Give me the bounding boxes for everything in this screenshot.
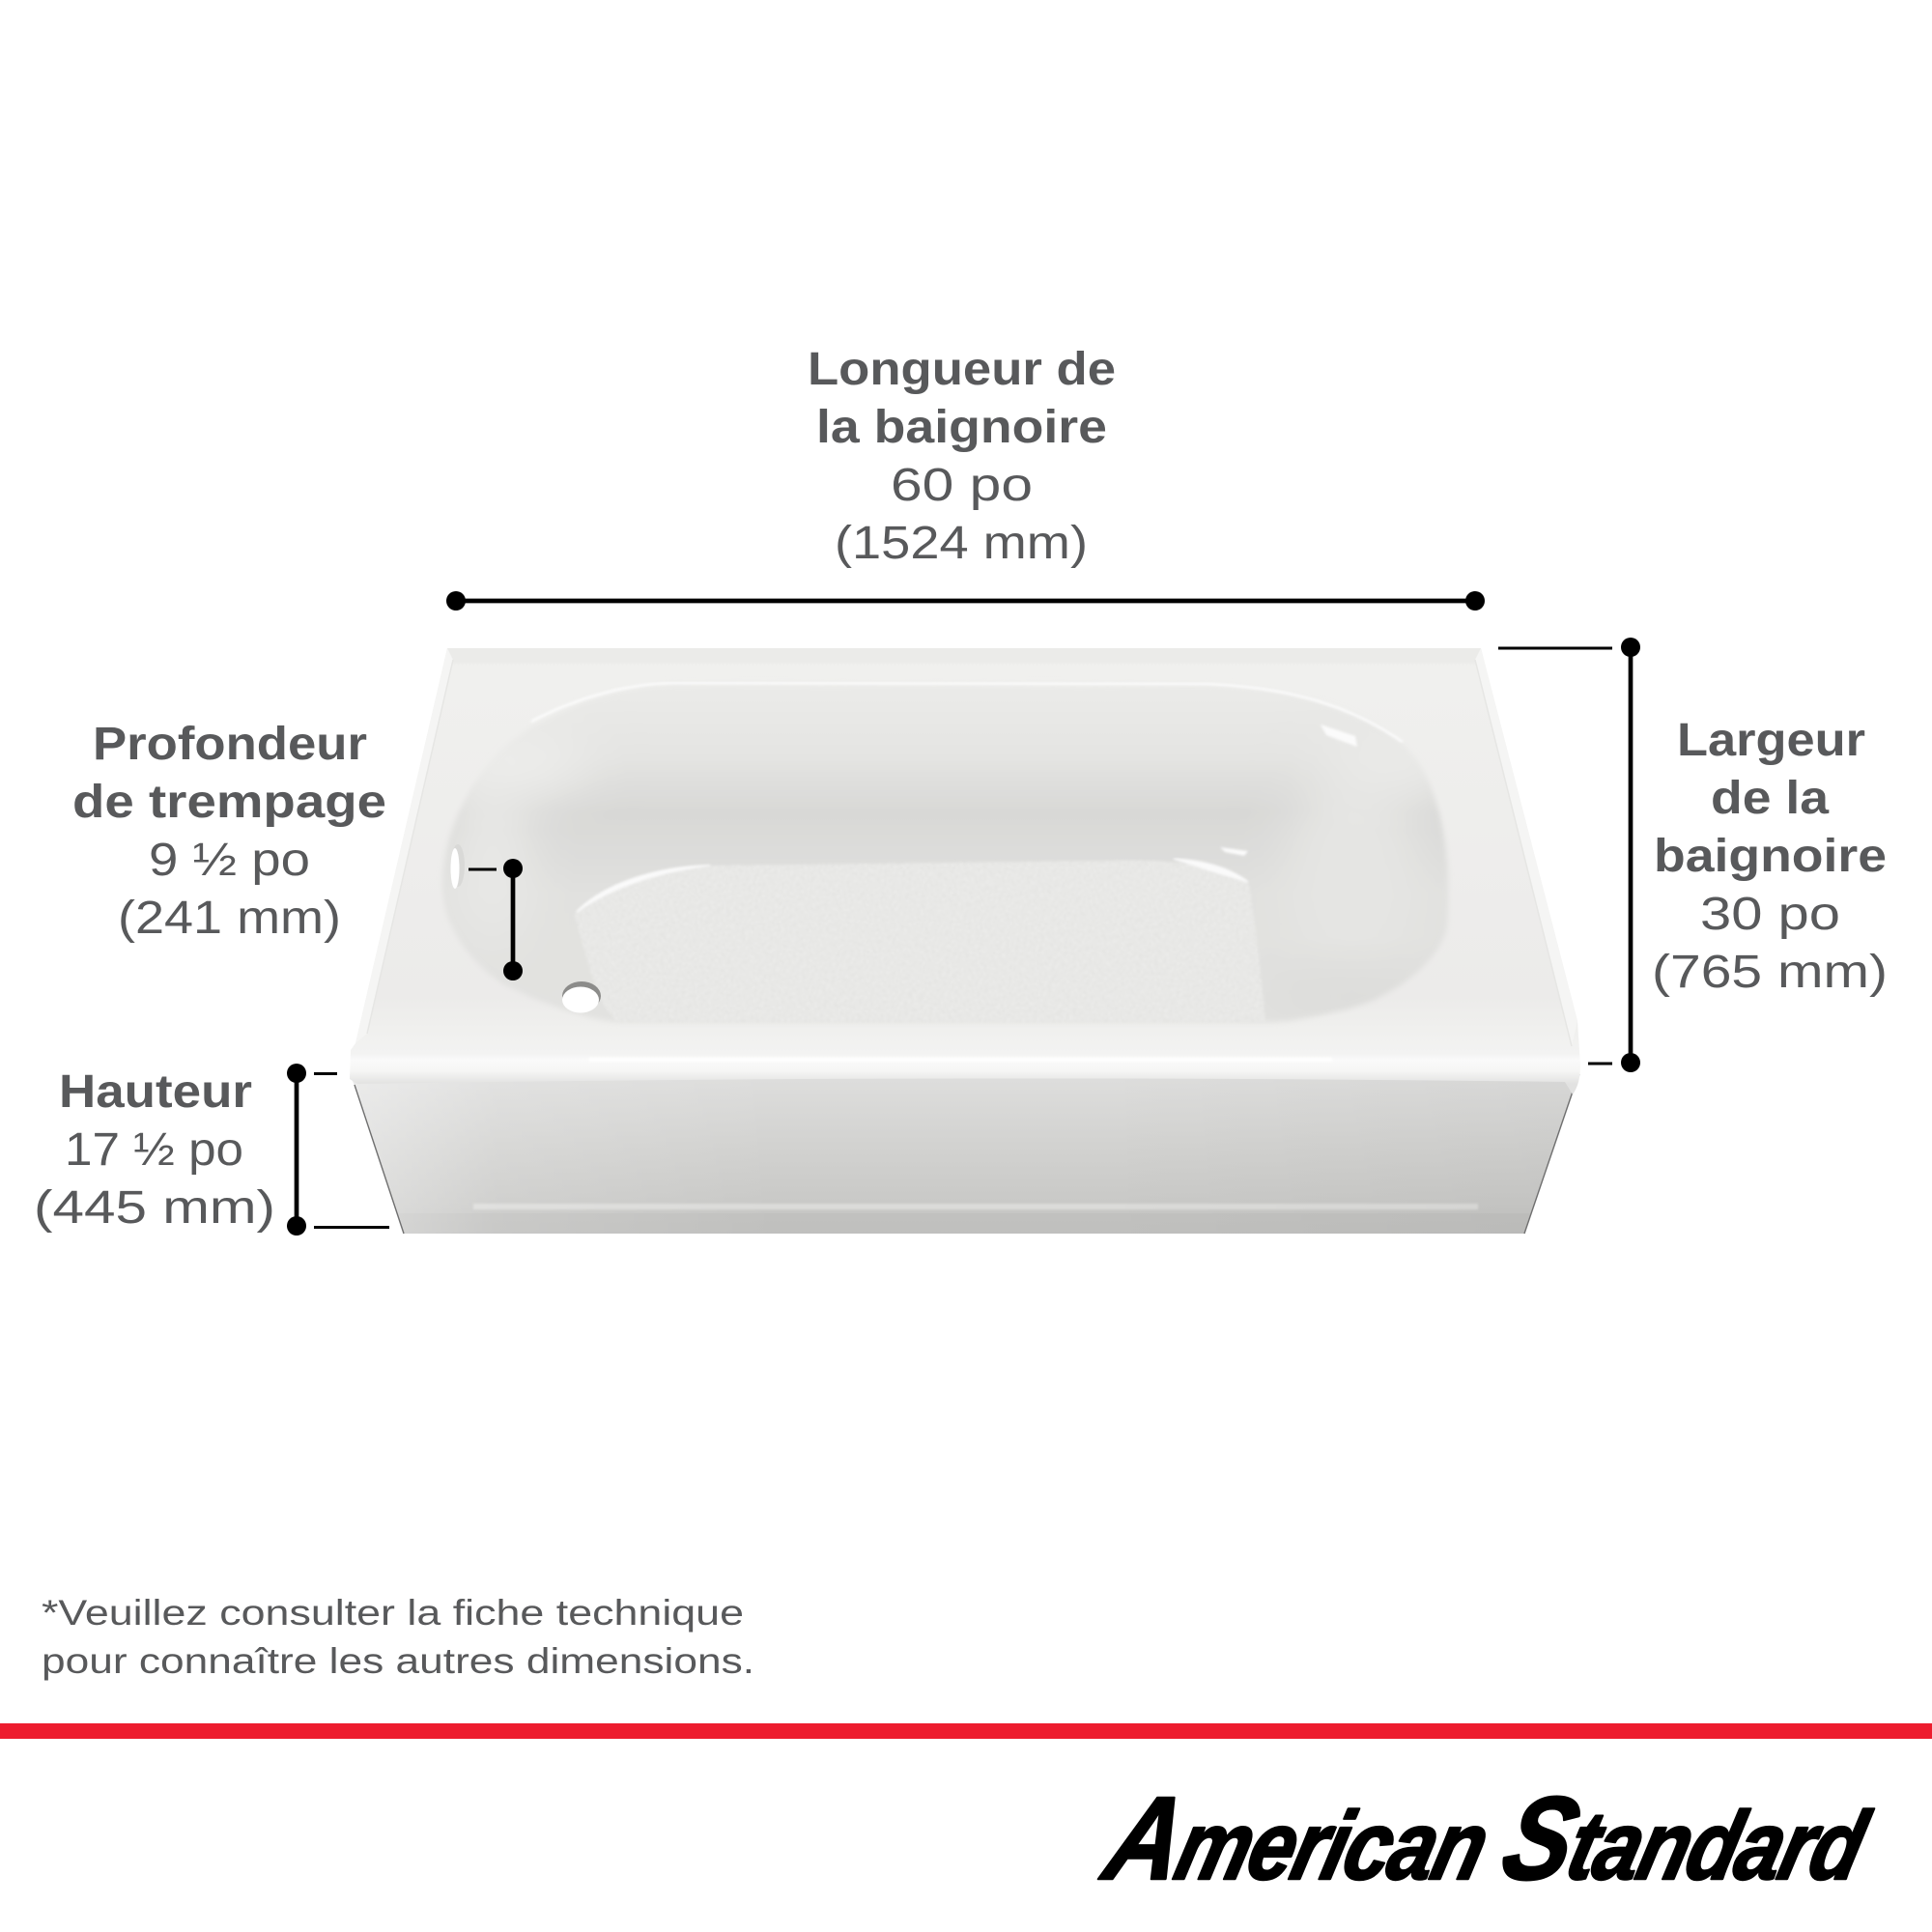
tub basin [444, 721, 1447, 1022]
label: tub width: baignoire [1654, 831, 1887, 882]
drain [562, 981, 601, 1012]
dimension: soaking depth line [469, 859, 523, 980]
label: tub width: 30 po [1700, 889, 1840, 940]
label: tub width: (765 mm) [1652, 947, 1888, 998]
label: height [34, 1066, 275, 1234]
label: height: 17 ½ po [65, 1124, 243, 1176]
floor highlights [577, 859, 1248, 912]
tub deck and front rim [350, 648, 1580, 1094]
label: tub length [808, 344, 1116, 569]
textured floor [574, 861, 1265, 1022]
American Standard logo: American Standard [1092, 1774, 1884, 1905]
label: soaking depth: 9 ½ po [149, 835, 310, 886]
label: tub length: (1524 mm) [835, 518, 1088, 569]
label: tub width: Largeur [1677, 715, 1865, 766]
dimension: length line [446, 591, 1485, 611]
infographic canvas [0, 351, 1932, 1882]
label: soaking depth: Profondeur [93, 719, 367, 770]
footnote [42, 1593, 754, 1681]
label: tub length: Longueur de [808, 344, 1116, 395]
basin top highlight [531, 683, 1403, 742]
overflow opening [450, 844, 465, 889]
red divider bar [0, 1723, 1932, 1739]
footnote: *Veuillez consulter la fiche technique [42, 1593, 744, 1633]
label: tub length: la baignoire [816, 402, 1107, 453]
bathtub illustration [350, 648, 1580, 1234]
label: tub width [1652, 715, 1888, 998]
label: tub length: 60 po [891, 460, 1033, 511]
tub front panel [350, 1074, 1580, 1234]
footnote: pour connaître les autres dimensions. [42, 1641, 754, 1681]
dimension: height line [287, 1064, 389, 1236]
rim highlight [589, 1058, 1332, 1062]
label: tub width: de la [1711, 773, 1829, 824]
dimension: width line [1498, 638, 1640, 1072]
glints [1220, 724, 1357, 856]
label: soaking depth: (241 mm) [118, 893, 341, 944]
label: height: (445 mm) [34, 1182, 275, 1234]
label: soaking depth: de trempage [72, 777, 386, 828]
label: height: Hauteur [59, 1066, 252, 1118]
label: soaking depth [72, 719, 386, 944]
